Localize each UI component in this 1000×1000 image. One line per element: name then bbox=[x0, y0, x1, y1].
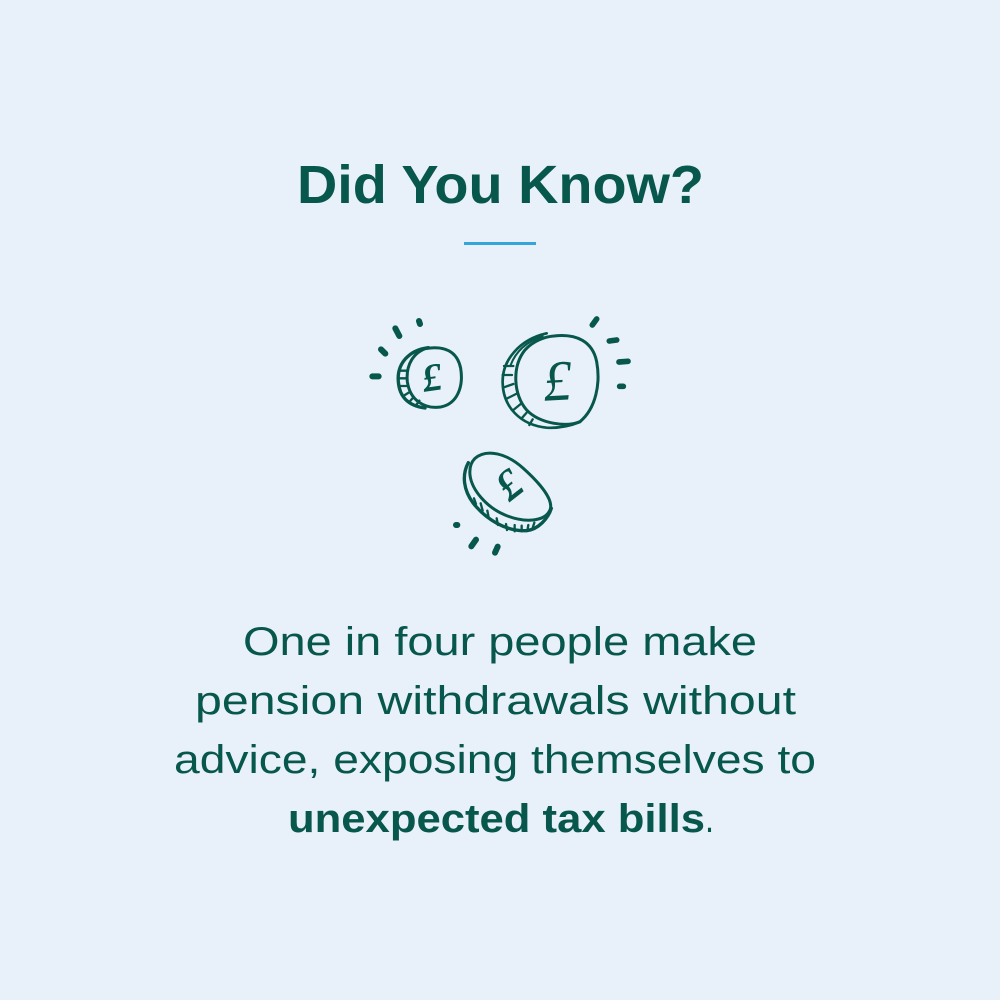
title underline bbox=[464, 242, 536, 245]
line 3: advice, exposing themselves to bbox=[174, 738, 816, 782]
icon: tilted falling coin with sparkle marks bbox=[456, 453, 551, 553]
illustration: three pound coins bbox=[372, 319, 628, 553]
icon: small coin with sparkle marks: £ bbox=[418, 354, 445, 401]
line 4: bold emphasis: unexpected tax bills bbox=[288, 797, 705, 841]
line 2: pension withdrawals without bbox=[195, 679, 796, 723]
icon: large coin with sparkle marks bbox=[503, 319, 628, 428]
icon: tilted falling coin with sparkle marks: £ bbox=[486, 460, 533, 511]
full stop: . bbox=[705, 797, 714, 841]
icon: large coin with sparkle marks: £ bbox=[541, 349, 574, 414]
icon: small coin with sparkle marks bbox=[372, 321, 461, 408]
line 1: One in four people make bbox=[243, 620, 757, 664]
body text bbox=[174, 620, 816, 841]
title: Did You Know? bbox=[297, 155, 704, 215]
